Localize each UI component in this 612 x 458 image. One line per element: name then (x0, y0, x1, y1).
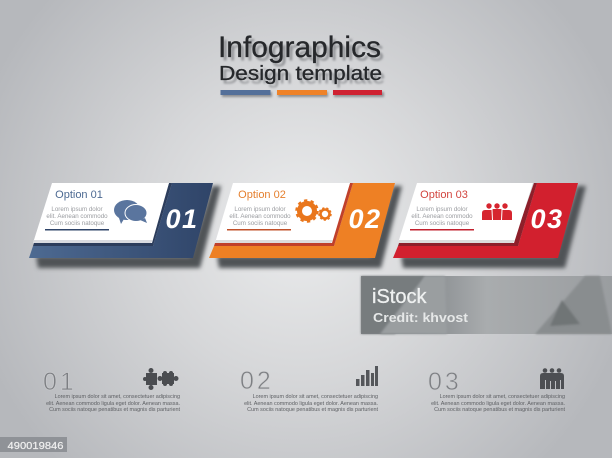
watermark credit: Credit: khvost (373, 311, 469, 325)
underline (410, 229, 474, 230)
subtitle: Design template (222, 66, 385, 88)
body text: Cum sociis natoque penatibus et magnis dis parturient (434, 407, 565, 413)
body text (229, 206, 291, 227)
number: 03 (428, 368, 462, 396)
stock id tag: 490019846 (8, 440, 64, 452)
underline (45, 229, 109, 230)
body text (46, 206, 108, 227)
white card (215, 183, 350, 243)
white card (398, 183, 533, 243)
title colour bars (220, 90, 384, 97)
dark inner band (398, 183, 537, 246)
number: 03 (530, 204, 564, 234)
icon: gears (296, 200, 331, 222)
column 01 (43, 368, 180, 413)
body text: Lorem ipsum dolor (234, 206, 286, 213)
underline (227, 229, 291, 230)
body text: elit. Aenean commodo ligula eget dolor. Aenean massa. (431, 401, 565, 407)
column 03 (428, 368, 565, 413)
icon: speech bubbles (114, 200, 147, 224)
option label: Option 02 (238, 189, 286, 201)
body text: Cum sociis natoque (415, 220, 470, 227)
number: 02 (240, 367, 274, 395)
body text: Lorem ipsum dolor sit amet, consectetuer adipiscing (253, 394, 378, 400)
body text (411, 206, 473, 227)
watermark logo: iStock (372, 286, 427, 308)
dark inner band (214, 183, 353, 246)
icon: bar chart (356, 366, 378, 386)
title: Infographics (218, 31, 381, 64)
option label: Option 01 (55, 189, 103, 201)
coloured ribbon (209, 183, 395, 258)
icon: team (482, 203, 512, 220)
body text: elit. Aenean commodo (46, 213, 108, 220)
number: 01 (165, 204, 199, 234)
coloured ribbon (393, 183, 578, 258)
stock id tag (0, 437, 67, 452)
subtitle: Design template (219, 63, 382, 85)
icon: puzzle pieces (143, 368, 178, 390)
panel shadow (36, 186, 221, 268)
body text (244, 394, 378, 413)
dark inner band (33, 183, 172, 246)
panel shadow (217, 186, 402, 268)
panel: option 02 (209, 183, 402, 268)
body text: elit. Aenean commodo (411, 213, 473, 220)
body text: Cum sociis natoque (233, 220, 288, 227)
body text: Cum sociis natoque penatibus et magnis dis parturient (247, 407, 378, 413)
panel: option 01 (29, 183, 221, 268)
panel shadow (401, 186, 586, 268)
body text: Lorem ipsum dolor sit amet, consectetuer adipiscing (55, 394, 180, 400)
number: 01 (43, 368, 77, 396)
body text: Lorem ipsum dolor (51, 206, 103, 213)
body text (46, 394, 180, 413)
body text: elit. Aenean commodo ligula eget dolor. Aenean massa. (46, 401, 180, 407)
title: Infographics (221, 34, 384, 68)
body text: elit. Aenean commodo (229, 213, 291, 220)
coloured ribbon (29, 183, 213, 258)
watermark banner (361, 276, 612, 334)
column 02 (240, 366, 378, 413)
body text: Cum sociis natoque (50, 220, 105, 227)
body text: elit. Aenean commodo ligula eget dolor. Aenean massa. (244, 401, 378, 407)
body text: Lorem ipsum dolor (416, 206, 468, 213)
option label: Option 03 (420, 189, 468, 201)
body text (431, 394, 565, 413)
panel: option 03 (393, 183, 586, 268)
body text: Lorem ipsum dolor sit amet, consectetuer adipiscing (440, 394, 565, 400)
icon: group of people (540, 368, 564, 389)
white card (33, 183, 169, 243)
body text: Cum sociis natoque penatibus et magnis dis parturient (49, 407, 180, 413)
number: 02 (348, 204, 382, 234)
